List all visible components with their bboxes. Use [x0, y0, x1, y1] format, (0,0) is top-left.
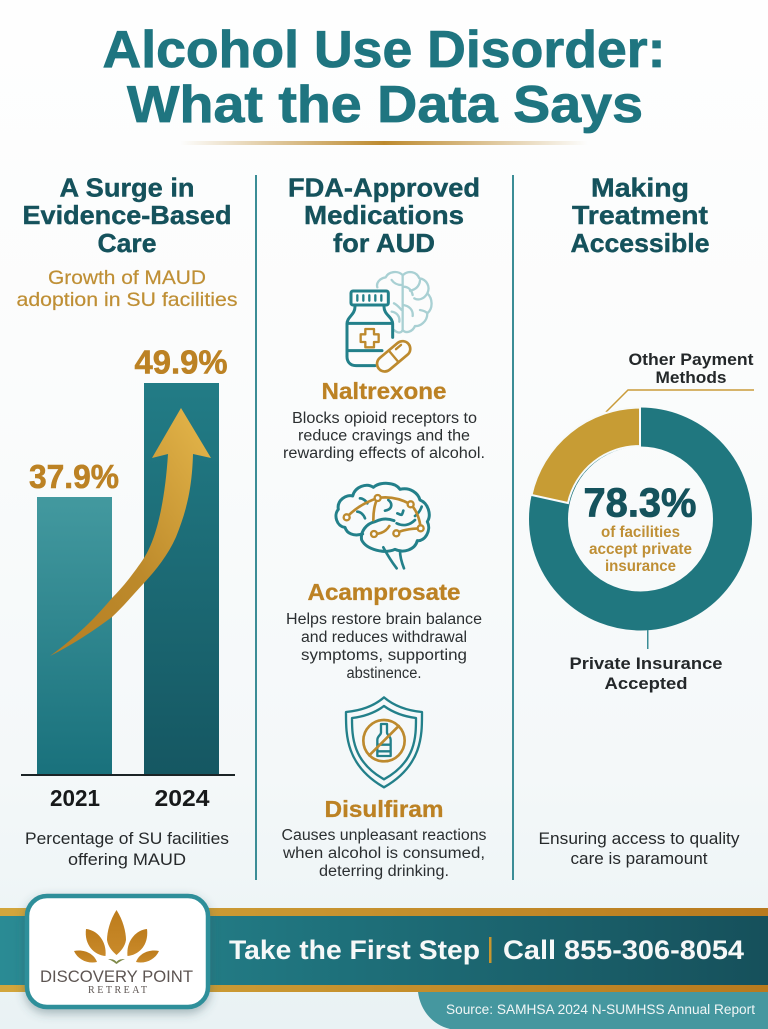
label: other payment methods — [606, 351, 754, 412]
label: other payment methods: Other Payment — [628, 351, 754, 369]
source tab: Source: SAMHSA 2024 N-SUMHSS Annual Report — [446, 1002, 755, 1017]
source tab — [418, 992, 768, 1029]
medication: naltrexone: rewarding effects of alcohol. — [283, 445, 485, 462]
label: private insurance accepted: Private Insurance — [570, 655, 722, 673]
label: private insurance accepted — [570, 630, 722, 693]
logo wordmark: DISCOVERY POINT — [40, 967, 193, 986]
medication: disulfiram: deterring drinking. — [319, 863, 449, 880]
heading: making treatment accessible — [570, 172, 710, 258]
heading: a surge in evidence-based care — [22, 172, 232, 258]
heading: FDA-approved medications: FDA-Approved — [288, 172, 480, 202]
medication: disulfiram: when alcohol is consumed, — [282, 845, 485, 862]
subheading: growth of MAUD: adoption in SU facilities — [16, 289, 238, 311]
title — [102, 21, 666, 134]
value: 49.9%: 49.9% — [134, 344, 228, 380]
title: Alcohol Use Disorder: — [102, 21, 666, 79]
donut chart — [532, 408, 732, 611]
label: 2024: 2024 — [154, 785, 210, 811]
donut centre caption: insurance — [605, 558, 676, 575]
caption: ensuring access: care is paramount — [570, 850, 708, 868]
medication: naltrexone: Naltrexone — [322, 378, 446, 404]
heading: FDA-approved medications: Medications — [304, 200, 464, 230]
label: other payment methods: Methods — [656, 369, 726, 387]
medication: acamprosate: symptoms, supporting — [301, 647, 467, 664]
medication: disulfiram: Disulfiram — [324, 796, 444, 822]
icon: shield with crossed bottle — [346, 697, 422, 787]
heading: FDA-approved medications: for AUD — [333, 228, 435, 258]
medication: naltrexone — [283, 378, 485, 462]
medication: acamprosate: Helps restore brain balance — [286, 611, 482, 628]
panel: making treatment accessible — [532, 172, 754, 868]
heading: making treatment accessible: Treatment — [572, 200, 708, 230]
call to action: Call 855-306-8054 — [503, 935, 744, 965]
logo card — [27, 896, 208, 1007]
caption: ensuring access — [538, 830, 740, 868]
icon: brain with circuits — [336, 483, 429, 568]
caption: ensuring access: Ensuring access to quality — [538, 830, 740, 848]
donut centre caption: of facilities — [601, 524, 680, 541]
subheading: growth of MAUD — [16, 267, 238, 311]
logo card: RETREAT — [88, 985, 147, 996]
bar chart — [21, 344, 235, 811]
arrow: upward growth — [50, 408, 211, 656]
donut centre value: 78.3% — [584, 480, 696, 526]
donut centre caption — [589, 524, 692, 575]
call to action: Take the First Step — [229, 935, 480, 965]
heading: FDA-approved medications — [288, 172, 480, 258]
heading: making treatment accessible: Making — [591, 172, 689, 202]
medication: naltrexone: Blocks opioid receptors to — [292, 410, 477, 427]
footer band — [0, 908, 768, 992]
subheading: growth of MAUD: Growth of MAUD — [48, 267, 206, 289]
donut centre caption: accept private — [589, 541, 692, 558]
heading: a surge in evidence-based care: Evidence-Based — [22, 200, 232, 230]
logo mark — [74, 910, 159, 964]
panel: evidence-based care — [16, 172, 238, 869]
icon: bottle, capsule and brain — [347, 272, 432, 375]
heading: making treatment accessible: Accessible — [570, 228, 710, 258]
caption: percentage of facilities: Percentage of SU facilities — [25, 830, 229, 848]
caption: percentage of facilities — [25, 830, 229, 869]
call to action — [229, 935, 744, 965]
medication: disulfiram: Causes unpleasant reactions — [282, 827, 487, 844]
value: 37.9%: 37.9% — [29, 458, 119, 495]
panel: FDA-approved medications — [282, 172, 487, 880]
caption: percentage of facilities: offering MAUD — [68, 851, 186, 869]
medication: acamprosate: and reduces withdrawal — [301, 629, 467, 646]
heading: a surge in evidence-based care: Care — [98, 228, 156, 258]
heading: a surge in evidence-based care: A Surge in — [60, 172, 194, 202]
title: What the Data Says — [127, 76, 643, 134]
medication: acamprosate: Acamprosate — [308, 579, 460, 605]
medication: disulfiram — [282, 796, 487, 880]
label: private insurance accepted: Accepted — [604, 675, 688, 693]
medication: acamprosate: abstinence. — [346, 665, 422, 682]
label: 2021: 2021 — [50, 785, 100, 811]
medication: naltrexone: reduce cravings and the — [298, 428, 470, 444]
medication: acamprosate — [286, 579, 482, 682]
